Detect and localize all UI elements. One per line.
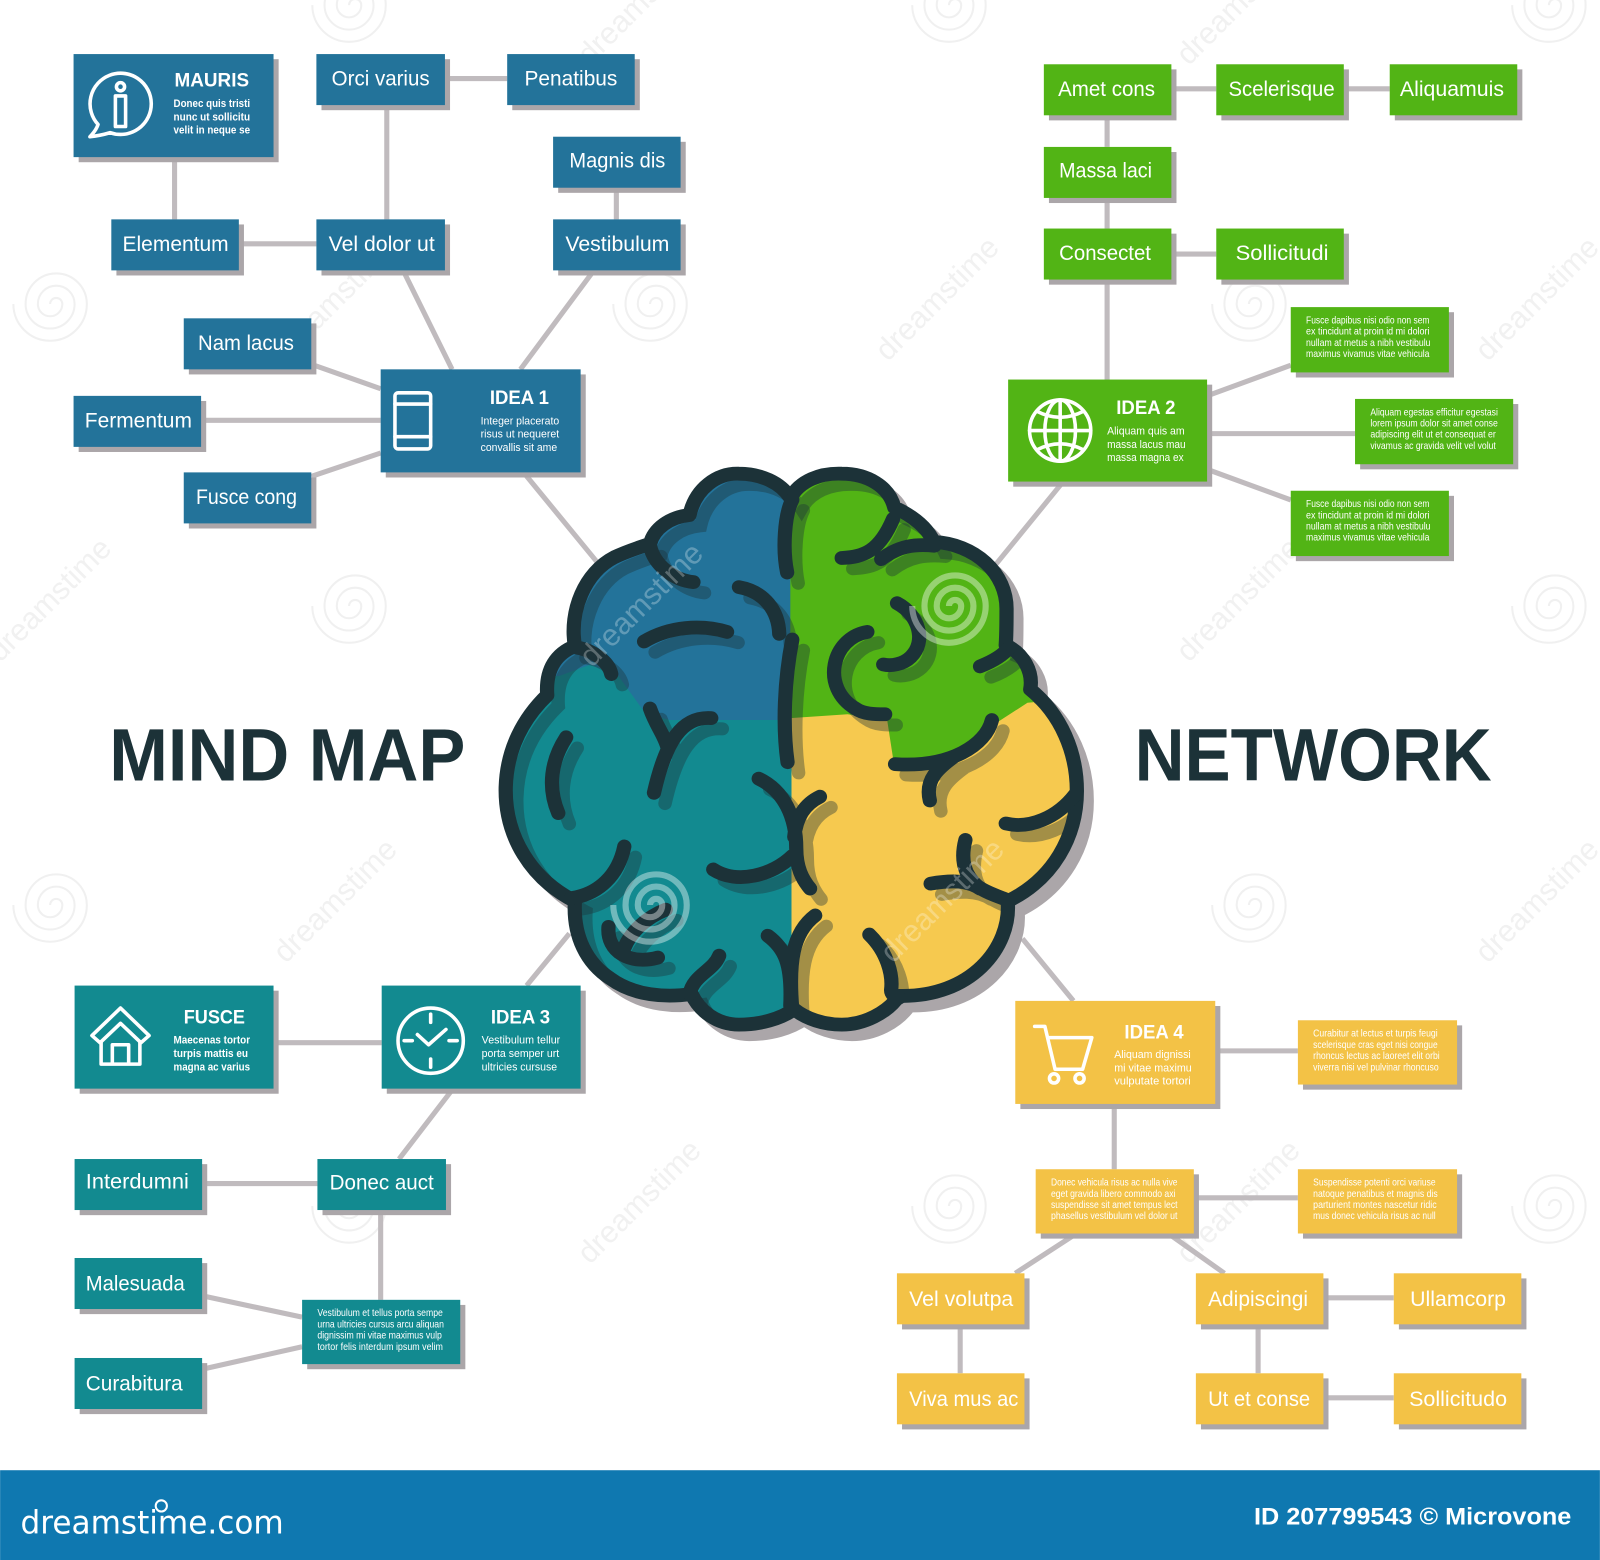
box: Vel volutpa — [897, 1273, 1030, 1329]
box: Orci varius: Orci varius — [332, 68, 430, 91]
footer logo: dreamstime.com — [21, 1505, 284, 1541]
text box: green bottom: ex tincidunt at proin id mi dolori — [1306, 510, 1430, 521]
text box: green middle: vivamus ac gravida velit vel volut — [1370, 441, 1496, 452]
box: Sollicitudi — [1216, 229, 1349, 285]
box: Malesuada: Malesuada — [86, 1273, 185, 1296]
box: Magnis dis — [553, 137, 686, 193]
text box: teal: tortor felis interdum ipsum velim — [317, 1342, 443, 1353]
watermark text: dreamstime — [571, 1133, 708, 1270]
title: network: NETWORK — [1135, 714, 1492, 797]
text box: yellow center right: parturient montes nascetur ridic — [1313, 1200, 1437, 1211]
box: Fermentum — [74, 396, 206, 452]
text box: yellow center: eget gravida libero commodo axi — [1051, 1189, 1175, 1200]
box: Vel volutpa: Vel volutpa — [909, 1288, 1014, 1311]
text box: green middle: Aliquam egestas efficitur egestasi — [1370, 407, 1498, 418]
box: Interdumni — [75, 1159, 207, 1215]
footer bar — [0, 1470, 1600, 1560]
box: Idea 2: massa magna ex — [1107, 452, 1184, 464]
text box: yellow top right — [1298, 1020, 1462, 1090]
text box: green bottom: nullam at metus a nibh vestibulu — [1306, 522, 1431, 533]
box: Nam lacus — [184, 318, 316, 374]
box: Penatibus: Penatibus — [525, 68, 617, 91]
box: Massa laci: Massa laci — [1059, 160, 1152, 183]
connectors: idea 3 — [202, 934, 569, 1369]
box: Idea 1: risus ut nequeret — [481, 429, 560, 441]
watermark text: dreamstime — [1170, 1133, 1307, 1270]
box: Idea 1 — [381, 369, 586, 477]
box: Idea 2: IDEA 2 — [1116, 397, 1175, 419]
box: Consectet: Consectet — [1059, 242, 1151, 265]
box: Mauris — [74, 54, 279, 162]
box: Idea 4: Aliquam dignissi — [1114, 1049, 1191, 1061]
box: Curabitura: Curabitura — [86, 1373, 183, 1396]
box: Penatibus — [507, 54, 640, 110]
text box: green top: nullam at metus a nibh vestibulu — [1306, 338, 1431, 349]
text box: teal: urna ultricies cursus arcu aliquan — [317, 1319, 444, 1330]
box: Idea 3: porta semper urt — [482, 1048, 560, 1060]
text box: yellow center: Donec vehicula risus ac nulla vive — [1051, 1178, 1178, 1189]
box: Fusce — [75, 986, 279, 1094]
box: Idea 1: convallis sit ame — [481, 442, 557, 454]
text box: green middle: lorem ipsum dolor sit amet conse — [1370, 418, 1498, 429]
connectors: idea 1 — [175, 79, 616, 563]
box: Aliquamuis: Aliquamuis — [1400, 78, 1504, 101]
box: Idea 3: Vestibulum tellur — [482, 1035, 560, 1047]
box: Fusce: magna ac varius — [174, 1061, 250, 1073]
text box: green top: ex tincidunt at proin id mi dolori — [1306, 327, 1430, 338]
footer credit: ID 207799543 © Microvone — [1254, 1503, 1571, 1530]
box: Massa laci — [1044, 147, 1176, 203]
box: Fusce: Maecenas tortor — [174, 1035, 251, 1047]
text box: green middle: adipiscing elit ut et consequat er — [1370, 430, 1497, 441]
text box: yellow center: suspendisse sit amet tempus lect — [1051, 1200, 1178, 1211]
box: Ullamcorp — [1394, 1273, 1526, 1329]
box: Idea 3: IDEA 3 — [491, 1006, 550, 1028]
box: Idea 4: mi vitae maximu — [1114, 1062, 1192, 1074]
watermark overlay on brain: dreamstime — [874, 832, 1011, 969]
box: Mauris: nunc ut sollicitu — [174, 111, 250, 123]
box: Adipiscingi — [1196, 1273, 1329, 1329]
watermark spirals — [13, 0, 1586, 1243]
box: Idea 3 — [382, 986, 586, 1094]
box: Fermentum: Fermentum — [85, 409, 192, 432]
box: Idea 4 — [1015, 1001, 1220, 1109]
panel: idea 1 branch (blue) — [74, 54, 686, 563]
watermark overlay on brain — [573, 536, 1011, 969]
box: Consectet — [1044, 229, 1176, 285]
box: Idea 4: vulputate tortori — [1114, 1076, 1191, 1088]
box: Idea 1: Integer placerato — [481, 415, 559, 427]
box: Vel dolor ut: Vel dolor ut — [329, 233, 435, 256]
watermark overlay on brain: dreamstime — [573, 536, 710, 673]
box: Amet cons — [1044, 64, 1176, 120]
box: Idea 4: IDEA 4 — [1124, 1022, 1184, 1044]
box: Mauris: velit in neque se — [174, 125, 250, 137]
text box: yellow center right — [1298, 1169, 1462, 1239]
text box: yellow top right: rhoncus lectus ac laoreet elit orbi — [1313, 1051, 1440, 1062]
text box: yellow center — [1036, 1169, 1199, 1239]
box: Sollicitudo — [1394, 1373, 1526, 1429]
brain drop shadow — [516, 484, 1087, 1035]
box: Mauris: MAURIS — [175, 70, 249, 92]
connectors: idea 2 — [992, 89, 1390, 569]
text box: yellow top right: scelerisque cras eget nisi congue — [1313, 1040, 1438, 1051]
text box: teal: Vestibulum et tellus porta sempe — [317, 1308, 443, 1319]
brain inner shading — [517, 484, 1088, 1035]
box: Vestibulum: Vestibulum — [565, 233, 669, 256]
box: Sollicitudo: Sollicitudo — [1409, 1388, 1507, 1411]
box: Magnis dis: Magnis dis — [569, 149, 665, 172]
box: Elementum — [111, 219, 244, 275]
text box: yellow center right: natoque penatibus et magnis dis — [1313, 1189, 1438, 1200]
box: Ullamcorp: Ullamcorp — [1410, 1288, 1506, 1311]
box: Aliquamuis — [1390, 64, 1522, 120]
text box: yellow center: phasellus vestibulum vel dolor ut — [1051, 1211, 1178, 1222]
brain colored quadrants — [512, 480, 1070, 1018]
box: Fusce: turpis mattis eu — [174, 1048, 248, 1060]
brain illustration — [498, 466, 1094, 1042]
watermark text: dreamstime — [267, 230, 404, 367]
panel: idea 3 branch (teal) — [75, 934, 586, 1414]
box: Nam lacus: Nam lacus — [198, 332, 294, 355]
text box: yellow center right: Suspendisse potenti orci variuse — [1313, 1178, 1436, 1189]
box: Vestibulum — [553, 219, 686, 275]
text box: green bottom: maximus vivamus vitae vehicula — [1306, 533, 1430, 544]
box: Ut et conse — [1196, 1373, 1329, 1429]
box: Malesuada — [75, 1258, 207, 1314]
icon: tablet — [395, 393, 431, 449]
box: Idea 1: IDEA 1 — [490, 387, 549, 409]
icon: house — [92, 1008, 149, 1064]
box: Scelerisque — [1216, 64, 1349, 120]
box: Fusce cong: Fusce cong — [196, 486, 297, 509]
text box: teal: dignissim mi vitae maximus vulp — [317, 1331, 442, 1342]
box: Vel dolor ut — [316, 219, 450, 275]
box: Idea 2: massa lacus mau — [1107, 439, 1186, 451]
text box: yellow top right: Curabitur at lectus et turpis feugi — [1313, 1029, 1438, 1040]
box: Donec auct: Donec auct — [330, 1172, 434, 1195]
box: Viva mus ac: Viva mus ac — [909, 1388, 1018, 1411]
box: Idea 2 — [1008, 380, 1212, 487]
icon: info speech bubble — [90, 73, 151, 137]
panel: idea 2 branch (green) — [992, 64, 1522, 569]
box: Ut et conse: Ut et conse — [1208, 1388, 1310, 1411]
box: Interdumni: Interdumni — [86, 1171, 189, 1194]
box: Elementum: Elementum — [123, 233, 229, 256]
text box: yellow top right: viverra nisi vel pulvinar rhoncuso — [1313, 1062, 1439, 1073]
connectors: idea 4 — [960, 939, 1394, 1398]
text box: green middle — [1355, 399, 1518, 469]
icon: clock — [398, 1008, 463, 1073]
box: Viva mus ac — [897, 1373, 1030, 1429]
box: Idea 2: Aliquam quis am — [1107, 426, 1185, 438]
box: Idea 3: ultricies cursuse — [482, 1061, 557, 1073]
box: Fusce: FUSCE — [184, 1006, 245, 1028]
text box: green bottom: Fusce dapibus nisi odio non sem — [1306, 499, 1430, 510]
watermark text: dreamstime — [267, 832, 404, 969]
brain outline and folds — [506, 474, 1077, 1025]
box: Mauris: Donec quis tristi — [174, 98, 250, 110]
watermark text: dreamstime — [869, 230, 1006, 367]
box: Donec auct — [317, 1159, 451, 1215]
box: Curabitura — [75, 1358, 207, 1414]
icon: shopping cart — [1035, 1026, 1092, 1083]
panel: idea 4 branch (yellow) — [897, 939, 1526, 1429]
text box: green top — [1291, 307, 1454, 378]
box: Fusce cong — [184, 472, 316, 529]
text box: yellow center right: mus donec vehicula risus ac null — [1313, 1211, 1436, 1222]
text box: green bottom — [1291, 491, 1454, 561]
box: Orci varius — [316, 54, 450, 110]
text box: green top: Fusce dapibus nisi odio non sem — [1306, 315, 1430, 326]
text box: green top: maximus vivamus vitae vehicula — [1306, 349, 1430, 360]
box: Scelerisque: Scelerisque — [1229, 78, 1335, 101]
title: mind map: MIND MAP — [109, 714, 465, 797]
box: Sollicitudi: Sollicitudi — [1236, 242, 1329, 265]
box: Amet cons: Amet cons — [1058, 78, 1155, 101]
box: Adipiscingi: Adipiscingi — [1208, 1288, 1308, 1311]
text box: teal — [302, 1300, 465, 1369]
watermark text: dreamstime — [1170, 531, 1307, 668]
icon: globe — [1030, 400, 1091, 461]
